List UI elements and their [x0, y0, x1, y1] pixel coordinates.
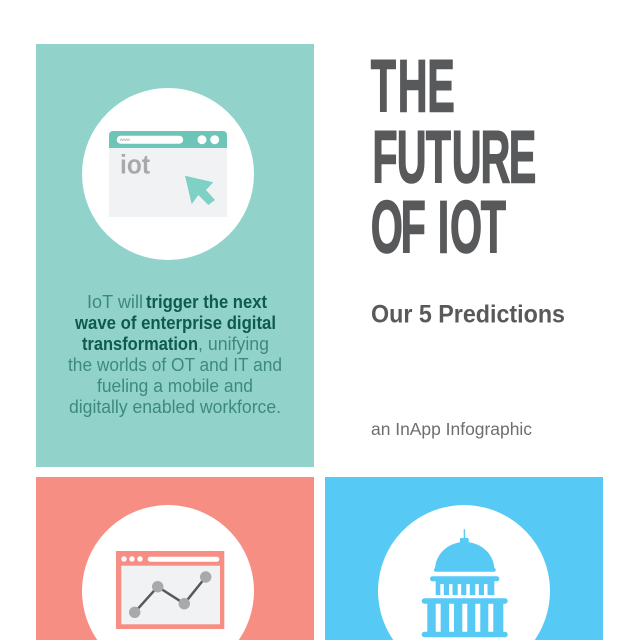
title: [371, 45, 536, 268]
subtitle: Our 5 Predictions: [371, 302, 565, 329]
title: FUTURE: [372, 116, 536, 198]
panel: blue prediction: [325, 477, 603, 640]
text block: teal prediction: fueling a mobile and: [97, 376, 253, 396]
text block: teal prediction: trigger the next: [146, 292, 267, 312]
icon: capitol building: [378, 505, 550, 640]
text block: teal prediction: transformation: [82, 334, 198, 354]
icon: browser with line chart: [82, 505, 254, 640]
icon: browser with cursor: iot: [120, 150, 150, 180]
text block: teal prediction: [68, 292, 282, 417]
panel: teal prediction: [36, 44, 314, 467]
icon: browser with cursor: www: [120, 137, 130, 142]
byline: an InApp Infographic: [371, 419, 532, 439]
icon: browser with cursor: [82, 88, 254, 260]
title: THE: [371, 45, 455, 127]
text block: teal prediction: digitally enabled workforce.: [69, 397, 281, 417]
text block: teal prediction: , unifying: [198, 334, 269, 354]
title: OF IOT: [371, 186, 506, 268]
text block: teal prediction: the worlds of OT and IT and: [68, 355, 282, 375]
text block: teal prediction: IoT will: [87, 292, 143, 312]
text block: teal prediction: wave of enterprise digital: [74, 313, 276, 333]
panel: coral prediction: [36, 477, 314, 640]
